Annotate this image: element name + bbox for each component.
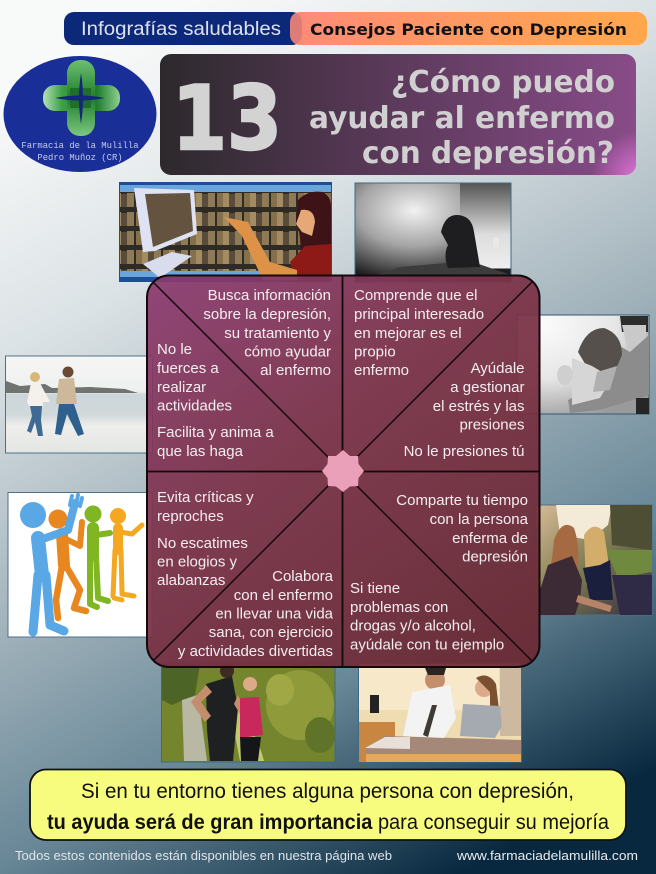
text: evita críticas: No escatimes — [157, 535, 248, 552]
text: ayúdale a gestionar: No le presiones tú — [404, 443, 524, 460]
text: comprende: principal interesado — [354, 306, 484, 323]
text: ayúdale a gestionar: presiones — [459, 416, 524, 434]
title panel — [160, 54, 636, 175]
figure: blue — [20, 495, 82, 632]
text: busca información: al enfermo — [260, 362, 331, 379]
photo: comforting a person — [517, 315, 649, 414]
text: comparte tu tiempo: con la persona — [430, 511, 529, 528]
text: drogas y alcohol: ayúdale con tu ejemplo — [350, 636, 504, 654]
text: no le fuerces: realizar — [157, 379, 206, 396]
text: no le fuerces: fuerces a — [157, 360, 219, 377]
text: colabora: y actividades divertidas — [178, 643, 333, 660]
text: comparte tu tiempo: depresión — [462, 548, 528, 566]
text: colabora: sana, con ejercicio — [209, 624, 333, 641]
text: colabora: en llevar una vida — [215, 606, 334, 622]
text: drogas y alcohol: problemas con — [350, 599, 448, 616]
woman — [30, 372, 40, 382]
man — [62, 366, 74, 378]
text: drogas y alcohol: Si tiene — [350, 580, 400, 597]
text: colabora: con el enfermo — [234, 587, 333, 604]
text: comprende: enfermo — [354, 362, 409, 379]
girl right — [584, 527, 609, 590]
text: evita críticas: alabanzas — [157, 572, 225, 589]
man — [425, 670, 445, 690]
text: comprende: propio — [354, 344, 396, 360]
photo: friends embracing — [535, 505, 652, 615]
header pill: Consejos Paciente con Depresión: Consejos Paciente con Depresión — [310, 20, 627, 39]
title text — [309, 65, 615, 171]
woman — [475, 679, 493, 697]
text: evita críticas — [157, 489, 254, 589]
text: comprende — [354, 287, 484, 379]
footer left text: Todos estos contenidos están disponibles en nuestra página web — [15, 848, 392, 863]
photo: library and monitor — [119, 182, 332, 282]
text: evita críticas: en elogios y — [157, 554, 238, 570]
photo: couple running — [162, 663, 335, 762]
text: comparte tu tiempo: Comparte tu tiempo — [396, 492, 528, 509]
text: busca información: Busca información — [208, 287, 331, 304]
text: busca información: cómo ayudar — [244, 344, 331, 360]
text: no le fuerces: actividades — [157, 398, 232, 414]
text: no le fuerces: Facilita y anima a — [157, 424, 274, 441]
text: colabora: Colabora — [272, 568, 334, 585]
text: evita críticas: Evita críticas y — [157, 489, 254, 506]
photo: woman in corner — [355, 183, 511, 282]
title text: ayudar al enfermo — [309, 101, 615, 136]
text: drogas y alcohol — [350, 580, 504, 654]
header pill: Consejos Paciente con Depresión — [64, 12, 647, 45]
header pill: Infografías saludables: Infografías saludables — [81, 18, 281, 40]
woman runner — [243, 677, 257, 691]
photo: couple on the beach — [6, 356, 152, 453]
man runner — [206, 676, 238, 761]
number 13: 13 — [172, 67, 282, 170]
callout: yellow conclusion — [30, 770, 626, 840]
callout: yellow conclusion: tu ayuda será de gran importancia para conseguir su mejoría — [47, 811, 609, 834]
text: comprende: Comprende que el — [354, 287, 477, 304]
text: comparte tu tiempo — [396, 492, 529, 566]
icon: green cross ribbon — [43, 60, 120, 136]
text: busca información: sobre la depresión, — [203, 306, 331, 323]
text: ayúdale a gestionar: el estrés y las — [433, 398, 524, 415]
callout: yellow conclusion: Si en tu entorno tienes alguna persona con depresión, — [81, 780, 574, 803]
text: ayúdale a gestionar: a gestionar — [450, 379, 525, 396]
logo text: Farmacia de la Mulilla — [21, 141, 139, 151]
girl left — [550, 525, 578, 580]
title text: ¿Cómo puedo — [391, 65, 615, 100]
text: drogas y alcohol: drogas y/o alcohol, — [350, 618, 476, 634]
figure: orange right — [110, 508, 142, 600]
header pill: Infografías saludables — [64, 12, 302, 45]
footer website: www.farmaciadelamulilla.com — [456, 848, 638, 863]
photo: clapping figures — [8, 492, 152, 637]
logo: Farmacia de la Mulilla — [4, 56, 156, 172]
panel: eight-segment advice square — [147, 276, 540, 667]
text: ayúdale a gestionar — [404, 360, 525, 460]
text: ayúdale a gestionar: Ayúdale — [471, 360, 524, 377]
text: comparte tu tiempo: enferma de — [452, 530, 528, 547]
text: no le fuerces — [157, 341, 274, 460]
text: busca información: su tratamiento y — [224, 325, 331, 342]
figure: green — [84, 506, 110, 607]
title text: con depresión? — [362, 136, 614, 171]
text: comprende: en mejorar es el — [354, 325, 462, 342]
text: evita críticas: reproches — [157, 508, 224, 525]
text: busca información — [203, 287, 331, 379]
logo text: Pedro Muñoz (CR) — [37, 153, 123, 163]
text: no le fuerces: No le — [157, 341, 192, 358]
logo text — [21, 141, 139, 163]
icon: pink eight-pointed star — [322, 450, 364, 492]
text: colabora — [178, 568, 334, 660]
figure: orange — [48, 510, 86, 618]
text: no le fuerces: que las haga — [157, 443, 244, 460]
photo: couple drinking milk — [358, 663, 522, 762]
